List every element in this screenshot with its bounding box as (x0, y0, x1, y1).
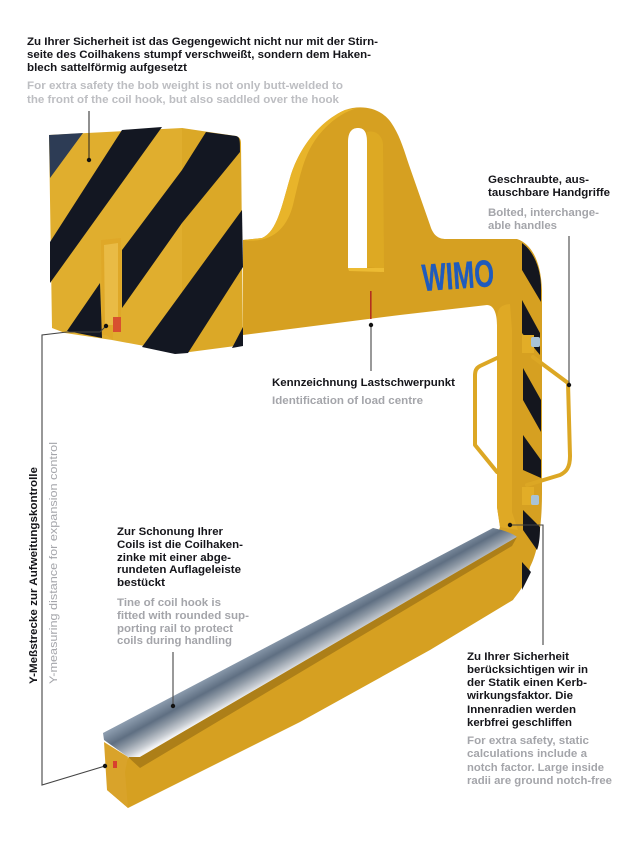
handle (475, 357, 570, 485)
text: handles note: Bolted, interchange- (488, 207, 599, 219)
arm front highlight (497, 304, 518, 530)
text: notch note: Innenradien werden (467, 704, 576, 716)
text: rail note: bestückt (117, 577, 165, 589)
leader: handles (567, 236, 571, 387)
leader: Y measuring (42, 324, 108, 785)
text: counterweight note (27, 36, 378, 106)
text: rail note: rundeten Auflageleiste (117, 564, 241, 576)
leader: load centre (369, 323, 373, 371)
leader: rail (171, 652, 175, 708)
text: notch note: wirkungsfaktor. Die (466, 690, 573, 702)
rail shadow on tine (128, 537, 517, 768)
text: counterweight note: seite des Coilhakens stumpf verschweißt, sondern dem Haken- (27, 49, 371, 61)
text: rail note: Zur Schonung Ihrer (117, 526, 224, 538)
text: counterweight note: Zu Ihrer Sicherheit ist das Gegengewicht nicht nur mit der Stirn- (27, 36, 378, 48)
front yellow face (49, 128, 182, 353)
text: rail note: zinke mit einer abge- (117, 552, 231, 564)
text: notch note (466, 651, 612, 787)
leader: notch (508, 523, 543, 645)
hook body (107, 107, 542, 808)
hook top edge highlight (243, 108, 358, 241)
text: counterweight note: blech sattelförmig aufgesetzt (27, 62, 187, 74)
text: notch note: kerbfrei geschliffen (467, 717, 572, 729)
side yellow face (182, 128, 243, 353)
text: rail note: porting rail to protect (117, 623, 233, 635)
bolts (522, 335, 540, 505)
text: handles note: tauschbare Handgriffe (488, 187, 610, 199)
counterweight (49, 127, 243, 354)
leader: counterweight (87, 111, 91, 162)
text: handles note (488, 174, 610, 232)
gauge inner (104, 243, 118, 325)
WIMO logo: WIMO (421, 253, 495, 300)
text: handles note: Geschraubte, aus- (488, 174, 589, 186)
text: notch note: notch factor. Large inside (467, 762, 604, 774)
text: rail note: Tine of coil hook is (117, 597, 221, 609)
text: load centre note: Kennzeichnung Lastschwerpunkt (272, 377, 455, 389)
text: counterweight note: For extra safety the bob weight is not only butt-welded to (27, 80, 343, 92)
gauge slot (101, 238, 121, 340)
text: notch note: For extra safety, static (467, 735, 589, 747)
black stripes (49, 127, 243, 354)
text: notch note: radii are ground notch-free (467, 775, 612, 787)
coil hook (49, 107, 570, 808)
text: counterweight note: the front of the coil hook, but also saddled over the hook (27, 94, 340, 106)
text: rail note: fitted with rounded sup- (117, 610, 249, 622)
text: notch note: Zu Ihrer Sicherheit (467, 651, 569, 663)
text: load centre note (272, 377, 455, 407)
gauge red mark (113, 317, 121, 332)
text: load centre note: Identification of load centre (272, 395, 423, 407)
text: rail note: Coils ist die Coilhaken- (117, 539, 243, 551)
text: rail note (117, 526, 249, 647)
lifting slot (348, 128, 384, 272)
text: Y measuring note (28, 442, 60, 684)
supporting rail (103, 528, 517, 757)
text: Y measuring note: Y-measuring distance for expansion control (48, 442, 60, 684)
text: notch note: berücksichtigen wir in (467, 664, 588, 676)
text: rail note: coils during handling (117, 635, 232, 647)
tine end face (104, 742, 128, 808)
text: notch note: calculations include a (467, 748, 588, 760)
load centre mark (370, 291, 372, 319)
text: Y measuring note: Y-Meßstrecke zur Aufweitungskontrolle (28, 467, 40, 684)
text: notch note: der Statik einen Kerb- (467, 677, 587, 689)
text: handles note: able handles (488, 220, 557, 232)
arm stripes (522, 243, 541, 590)
tine end mark (113, 761, 117, 768)
